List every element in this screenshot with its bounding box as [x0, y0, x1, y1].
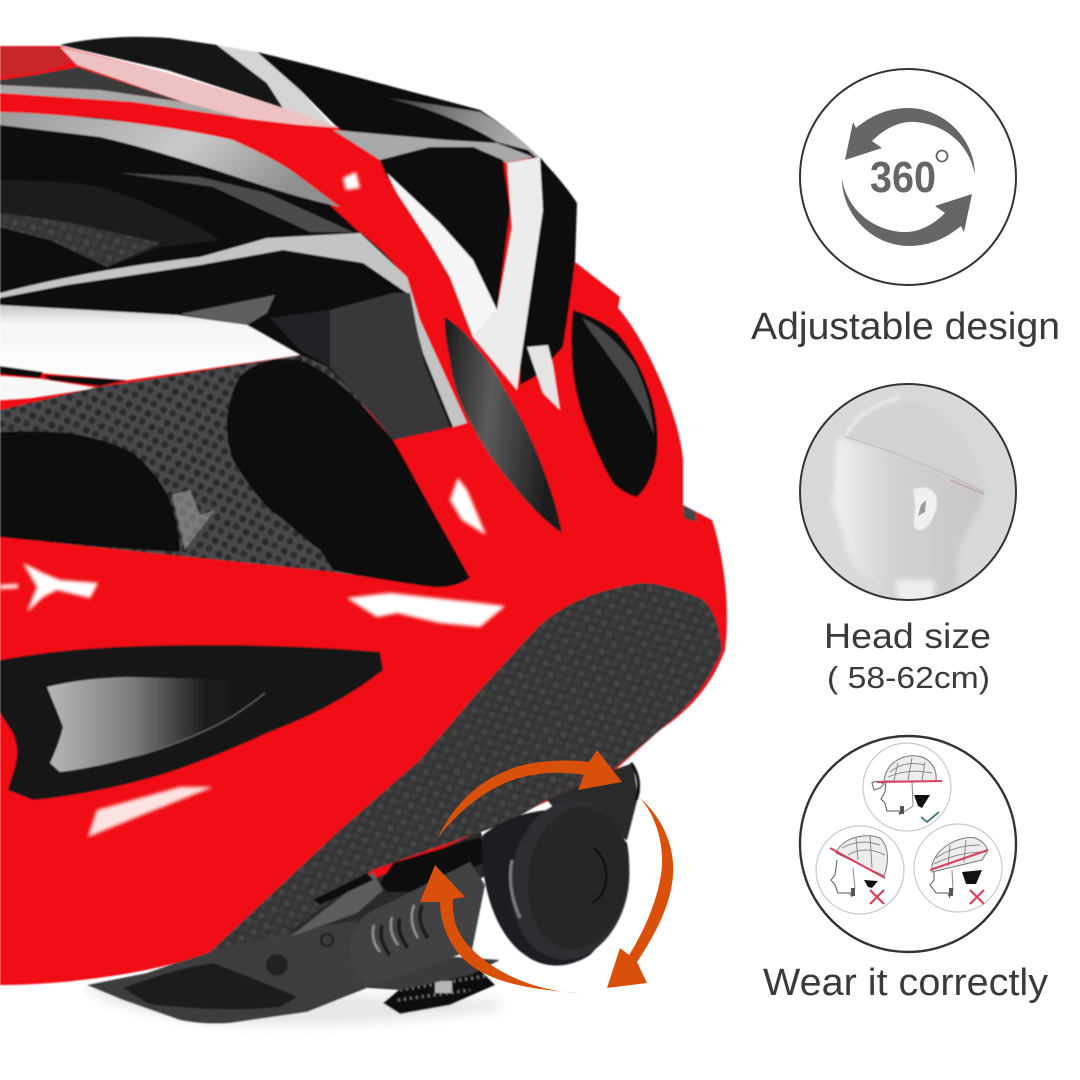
lower vent [0, 645, 383, 800]
helmet rear plate [87, 920, 367, 1024]
panel: adjustable design [751, 69, 1060, 348]
textured side panel [0, 355, 470, 587]
icon: wearing positions [800, 736, 1016, 952]
label: head size: Head size [824, 617, 991, 656]
arrow: left [420, 865, 580, 993]
top black shell [60, 37, 577, 410]
panel: wear it correctly [763, 736, 1048, 1004]
rotation arrows [420, 750, 673, 993]
icon: mannequin head [800, 384, 1016, 605]
grip [350, 862, 500, 990]
strap backing [200, 830, 495, 955]
red shell highlights [0, 172, 505, 837]
label: head size range: ( 58-62cm) [827, 660, 990, 695]
helmet photo [0, 37, 727, 1025]
helmet red shell [0, 46, 727, 985]
arrow: right [607, 798, 673, 988]
label: wear it correctly: Wear it correctly [763, 962, 1048, 1004]
arrow: top [438, 750, 622, 838]
cord [383, 963, 495, 1014]
strap gap [290, 837, 490, 937]
icon: tilted forward position [914, 824, 1002, 912]
icon: correct position [863, 743, 951, 831]
icon: tilted back position [816, 826, 904, 914]
icon: 360 rotation: 360 [870, 153, 936, 202]
left black panels [0, 112, 467, 440]
ground shadow [85, 985, 500, 1025]
panel: head size [800, 384, 1016, 695]
top left stripes [0, 46, 340, 128]
dial knob [482, 763, 640, 967]
icon: 360 rotation [800, 69, 1016, 285]
right vents [445, 310, 696, 533]
label: adjustable design: Adjustable design [751, 306, 1060, 348]
textured rear band [210, 583, 722, 952]
